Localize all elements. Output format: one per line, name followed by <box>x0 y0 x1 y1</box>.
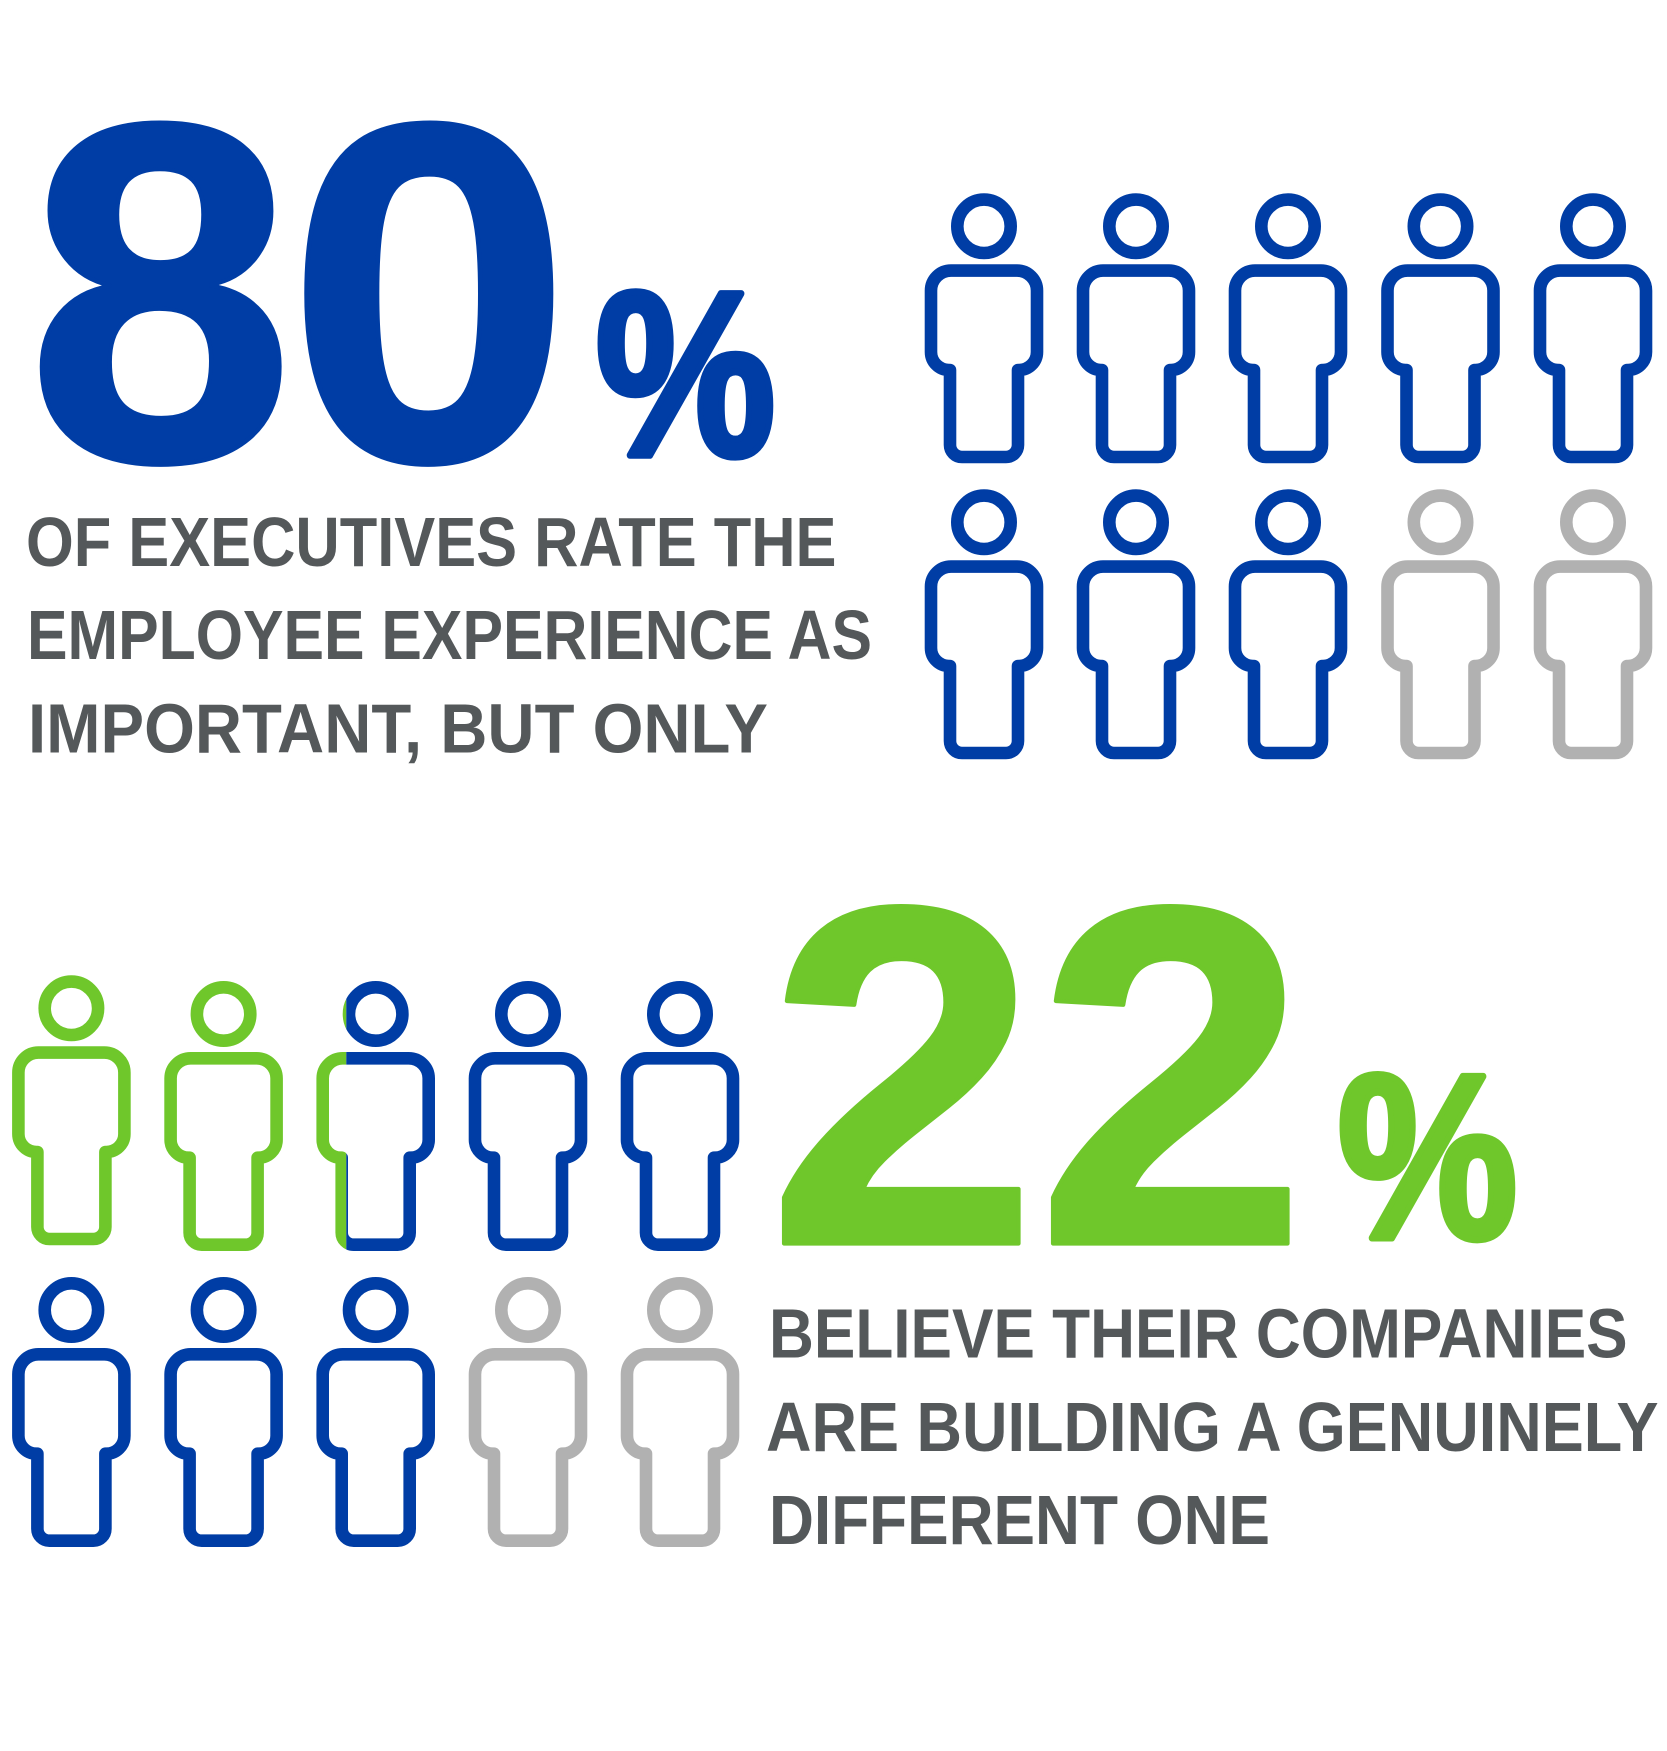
icon: person blue <box>475 987 581 1245</box>
icon: person grey <box>1388 496 1494 753</box>
percent sign: % <box>596 243 776 506</box>
icon: person blue <box>18 1283 124 1541</box>
pictogram: 8 of 10 people <box>931 200 1646 753</box>
icon: person green <box>171 987 277 1245</box>
icon: person blue <box>931 200 1037 457</box>
icon: person grey <box>475 1283 581 1541</box>
pictogram: 2.2 of 10 people <box>18 982 733 1541</box>
description text <box>766 1294 1658 1559</box>
icon: person grey <box>1540 496 1646 753</box>
icon: person grey <box>627 1283 733 1541</box>
icon: person blue <box>171 1283 277 1541</box>
big number 22: 2 <box>1036 806 1307 1346</box>
description text: EMPLOYEE EXPERIENCE AS <box>27 596 872 674</box>
icon: person blue <box>1388 200 1494 457</box>
description text: OF EXECUTIVES RATE THE <box>26 503 836 581</box>
panel: 22 percent statistic <box>12 904 1658 1547</box>
big number 80: 0 <box>286 22 572 563</box>
big number 22 <box>767 806 1307 1346</box>
icon: person blue <box>627 987 733 1245</box>
description text <box>26 503 872 768</box>
icon: person blue <box>323 1283 429 1541</box>
description text: IMPORTANT, BUT ONLY <box>28 690 768 768</box>
big number 80: 8 <box>27 23 294 563</box>
icon: person blue <box>1083 200 1189 457</box>
panel: 80 percent statistic <box>26 22 1646 767</box>
big number 22: 2 <box>767 806 1038 1346</box>
icon: person blue <box>1083 496 1189 753</box>
icon: person blue <box>931 496 1037 753</box>
icon: person blue <box>1235 200 1341 457</box>
icon: person green <box>18 982 124 1239</box>
icon: person blue <box>1235 496 1341 753</box>
big number 80 <box>27 22 572 563</box>
description text: DIFFERENT ONE <box>769 1481 1270 1559</box>
icon: person blue <box>1540 200 1646 457</box>
icon: person part green part blue <box>323 987 429 1245</box>
percent sign: % <box>1338 1026 1518 1288</box>
